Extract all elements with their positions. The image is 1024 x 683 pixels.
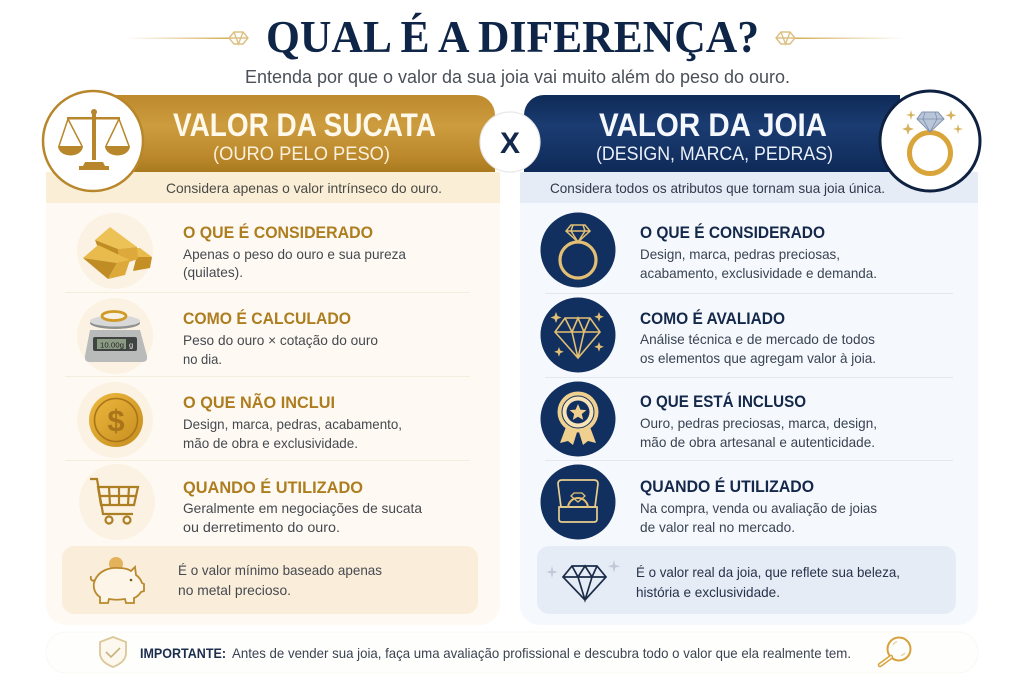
callout: valor mínimo: É o valor mínimo baseado apenas	[178, 562, 382, 578]
row: quando é utilizado: ou derretimento do ouro.	[183, 519, 340, 535]
row: como é avaliado	[540, 298, 876, 372]
icon: shield check	[100, 637, 126, 667]
icon: dollar coin: $	[107, 403, 125, 438]
row: o que é considerado: (quilates).	[183, 264, 243, 280]
row: quando é utilizado	[540, 464, 877, 540]
title ornament right	[776, 32, 905, 44]
callout: valor real	[537, 546, 956, 614]
row: como é calculado: no dia.	[183, 351, 222, 367]
row: o que está incluso: O QUE ESTÁ INCLUSO	[640, 392, 806, 411]
icon: digital scale: g	[129, 340, 133, 350]
left header	[110, 95, 495, 172]
row: o que é considerado	[540, 212, 877, 288]
row: o que é considerado: Apenas o peso do ouro e sua pureza	[183, 246, 406, 262]
row: quando é utilizado: QUANDO É UTILIZADO	[640, 477, 814, 496]
row: como é avaliado: Análise técnica e de mercado de todos	[640, 331, 875, 347]
callout: valor real: É o valor real da joia, que reflete sua beleza,	[636, 564, 900, 580]
icon: magnifier	[880, 638, 910, 665]
footer note	[46, 632, 978, 673]
icon: digital scale: 10.00g	[100, 340, 124, 350]
row: quando é utilizado: Na compra, venda ou avaliação de joias	[640, 500, 877, 516]
row: o que é considerado: O QUE É CONSIDERADO	[640, 223, 825, 242]
icon: piggy bank	[91, 557, 144, 603]
row: o que está incluso: Ouro, pedras preciosas, marca, design,	[640, 415, 877, 431]
panel: valor da sucata	[43, 91, 500, 625]
title ornament left	[125, 32, 248, 44]
left band	[46, 172, 500, 203]
icon: scales	[43, 91, 143, 191]
icon: ring badge	[540, 212, 616, 288]
icon: dollar coin	[89, 393, 143, 447]
icon: outline diamond	[546, 560, 620, 600]
callout: valor mínimo	[62, 546, 478, 614]
icon: digital scale	[85, 312, 147, 362]
left header: (OURO PELO PESO)	[213, 144, 390, 165]
row: o que é considerado	[77, 213, 406, 289]
right header: (DESIGN, MARCA, PEDRAS)	[596, 144, 833, 165]
row: como é calculado	[77, 298, 378, 374]
icon: rosette badge	[540, 382, 616, 456]
row: quando é utilizado: de valor real no mercado.	[640, 519, 795, 535]
row: como é calculado: COMO É CALCULADO	[183, 309, 351, 328]
right band	[520, 172, 978, 203]
icon: ring box badge	[540, 464, 616, 540]
right header: VALOR DA JOIA	[599, 107, 827, 143]
icon: shopping cart	[90, 479, 138, 524]
row: o que é considerado: acabamento, exclusividade e demanda.	[640, 265, 877, 281]
row: o que está incluso: mão de obra artesanal e autenticidade.	[640, 434, 875, 450]
title: QUAL É A DIFERENÇA?	[266, 12, 759, 62]
icon: gold bars	[83, 227, 152, 279]
row: como é avaliado: COMO É AVALIADO	[640, 309, 785, 328]
right band: Considera todos os atributos que tornam sua joia única.	[550, 180, 885, 196]
subtitle: Entenda por que o valor da sua joia vai muito além do peso do ouro.	[245, 67, 790, 87]
row: o que é considerado: O QUE É CONSIDERADO	[183, 223, 373, 242]
row: o que não inclui	[77, 382, 402, 458]
left header: VALOR DA SUCATA	[173, 107, 436, 143]
row: o que está incluso	[540, 382, 877, 456]
row: quando é utilizado	[79, 464, 422, 540]
icon: diamond badge	[540, 298, 616, 372]
versus badge	[480, 112, 540, 172]
row: o que não inclui: Design, marca, pedras, acabamento,	[183, 416, 402, 432]
icon: diamond ring	[880, 91, 980, 191]
row: quando é utilizado: QUANDO É UTILIZADO	[183, 478, 363, 497]
row: o que é considerado: Design, marca, pedras preciosas,	[640, 246, 840, 262]
right header	[524, 95, 900, 172]
callout: valor real: história e exclusividade.	[636, 584, 780, 600]
row: o que não inclui: mão de obra e exclusividade.	[183, 435, 358, 451]
panel: valor da joia	[520, 91, 980, 625]
left band: Considera apenas o valor intrínseco do ouro.	[166, 180, 442, 196]
footer note: Antes de vender sua joia, faça uma avaliação profissional e descubra todo o valor que ela realmente tem.	[232, 645, 851, 661]
row: o que não inclui: O QUE NÃO INCLUI	[183, 392, 335, 412]
footer note: IMPORTANTE:	[140, 645, 226, 661]
row: como é avaliado: os elementos que agregam valor à joia.	[640, 350, 876, 366]
callout: valor mínimo: no metal precioso.	[178, 582, 291, 598]
versus badge: X	[500, 127, 520, 160]
row: como é calculado: Peso do ouro × cotação do ouro	[183, 332, 378, 348]
row: quando é utilizado: Geralmente em negociações de sucata	[183, 500, 422, 516]
